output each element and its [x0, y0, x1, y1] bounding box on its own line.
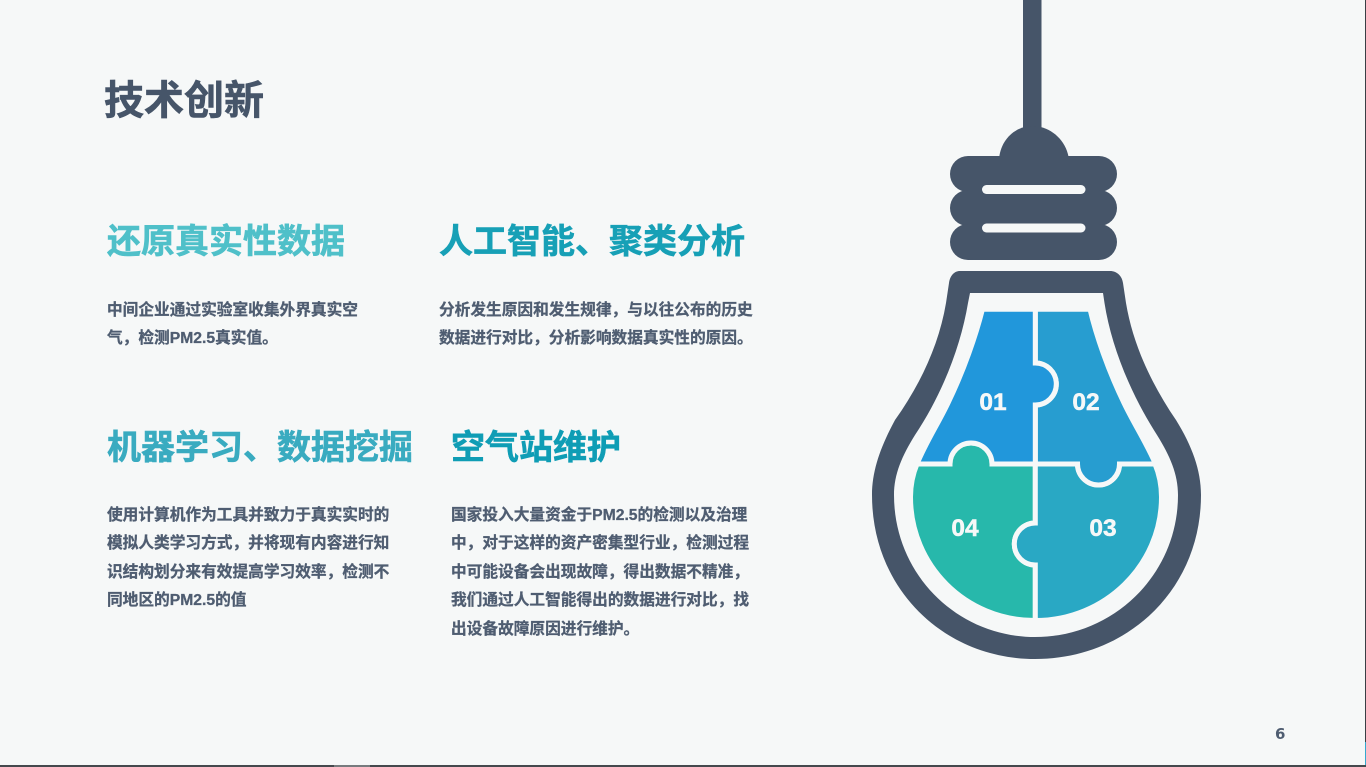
text block: AI clustering: [439, 301, 753, 347]
text block: air station maintenance: 我们通过人工智能得出的数据进行对比，找: [451, 592, 749, 609]
text block: machine learning: 模拟人类学习方式，并将现有内容进行知: [107, 535, 389, 552]
text block: AI clustering: 数据进行对比，分析影响数据真实性的原因。: [439, 330, 753, 347]
text block: machine learning: 识结构划分来有效提高学习效率，检测不: [107, 564, 389, 581]
text block: air station maintenance: 中可能设备会出现故障，得出数据不精准，: [451, 564, 749, 581]
number 01: 01: [979, 389, 1007, 416]
title: 技术创新: [104, 79, 264, 123]
text block: restore real data: 气，检测PM2.5真实值。: [107, 330, 278, 347]
icon: bulb cord and cap: [950, 0, 1117, 260]
heading: restore real data: 还原真实性数据: [107, 223, 345, 261]
number 04: 04: [951, 515, 979, 542]
heading: AI clustering: 人工智能、聚类分析: [439, 223, 745, 261]
text block: machine learning: 同地区的PM2.5的值: [107, 592, 246, 609]
heading: air station maintenance: 空气站维护: [451, 429, 621, 467]
puzzle piece 03: [1014, 464, 1162, 620]
puzzle piece 02: [1035, 309, 1156, 485]
text block: air station maintenance: 中，对于这样的资产密集型行业，检测过程: [451, 535, 749, 552]
heading: machine learning: 机器学习、数据挖掘: [107, 429, 413, 467]
puzzle pieces: [910, 309, 1162, 620]
text block: restore real data: [107, 300, 358, 347]
puzzle piece 01: [917, 309, 1056, 464]
text block: air station maintenance: 出设备故障原因进行维护。: [451, 621, 639, 638]
text block: machine learning: [107, 506, 390, 609]
number 03: 03: [1089, 515, 1117, 542]
page number: 6: [1275, 725, 1285, 743]
text block: restore real data: 中间企业通过实验室收集外界真实空: [107, 302, 358, 319]
icon: bulb glass outline: [872, 271, 1201, 659]
text block: AI clustering: 分析发生原因和发生规律，与以往公布的历史: [439, 302, 753, 319]
text block: air station maintenance: 国家投入大量资金于PM2.5的检测以及治理: [451, 507, 747, 524]
text block: air station maintenance: [451, 506, 749, 638]
text block: machine learning: 使用计算机作为工具并致力于真实实时的: [107, 507, 389, 524]
puzzle piece 04: [910, 443, 1035, 620]
number 02: 02: [1072, 389, 1100, 416]
